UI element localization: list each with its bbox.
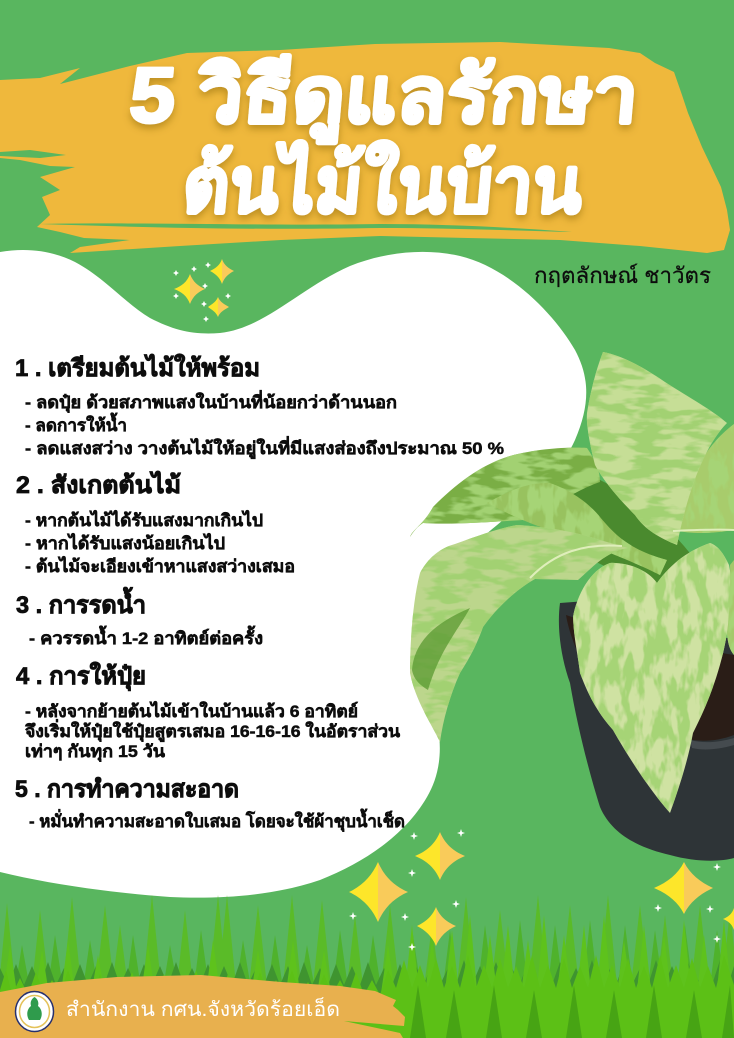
sparkle edge — [723, 908, 734, 930]
grass front — [0, 955, 734, 1038]
sparkle large — [349, 862, 408, 922]
sparkle lower — [208, 297, 229, 317]
bullet: - ลดแสงสว่าง วางต้นไม้ให้อยู่ในที่มีแสงส่องถึงประมาณ 50 % — [25, 436, 504, 460]
front large leaf — [573, 543, 732, 813]
heading 1: 1 . เตรียมต้นไม้ให้พร้อม — [15, 353, 260, 382]
line: - หลังจากย้ายต้นไม้เข้าในบ้านแล้ว 6 อาทิตย์ — [25, 701, 358, 721]
grass upper front blades — [2, 915, 732, 1000]
upper right leaf — [673, 424, 734, 533]
byline: กฤตลักษณ์ ชาวัตร — [534, 263, 711, 288]
sparkle large — [174, 274, 205, 304]
leaf stem — [530, 530, 734, 578]
line: จึงเริ่มให้ปุ๋ยใช้ปุ๋ยสูตรเสมอ 16-16-16 ในอัตราส่วน — [25, 719, 400, 743]
lower left leaf — [410, 525, 628, 742]
sparkle upper — [210, 259, 234, 284]
sparkles top — [173, 259, 234, 322]
heading 4: 4 . การให้ปุ๋ย — [16, 661, 146, 692]
dark back leaf — [560, 480, 695, 590]
footer text: สำนักงาน กศน.จังหวัดร้อยเอ็ด — [66, 996, 340, 1021]
logo — [16, 992, 54, 1032]
sparkle right — [654, 862, 713, 914]
sparkle small — [417, 907, 456, 946]
section 4 text — [25, 701, 400, 762]
lower left leaf dark patch — [412, 608, 470, 690]
bullet: - ต้นไม้จะเอียงเข้าหาแสงสว่างเสมอ — [25, 556, 295, 576]
top large leaf — [587, 352, 727, 545]
title — [126, 51, 642, 229]
grass dark shadow band — [0, 960, 734, 1038]
grass — [0, 895, 734, 1038]
logo emblem — [27, 997, 42, 1020]
grass tall blades — [0, 895, 734, 995]
heading 5: 5 . การทำความสะอาด — [15, 776, 239, 803]
grass blade highlights — [410, 985, 734, 1038]
middle leaf — [487, 483, 667, 575]
section 2 list — [25, 510, 295, 576]
grass short blades — [14, 920, 726, 995]
plant photo — [410, 352, 734, 861]
sparkle top — [415, 832, 465, 880]
white content panel — [0, 250, 586, 898]
bullet: - หากต้นไม้ได้รับแสงมากเกินไป — [25, 510, 263, 530]
banner green streak — [0, 150, 572, 232]
soil — [566, 615, 734, 741]
title line 2: ต้นไม้ในบ้าน — [180, 139, 586, 229]
bullet: - หากได้รับแสงน้อยเกินไป — [25, 533, 225, 553]
title line 1: 5 วิธีดูแลรักษา — [126, 51, 642, 144]
footer banner — [0, 975, 405, 1038]
right edge leaf — [727, 560, 734, 655]
bullet: - ลดปุ๋ย ด้วยสภาพแสงในบ้านที่น้อยกว่าด้านนอก — [25, 390, 397, 413]
heading 3: 3 . การรดน้ำ — [16, 586, 146, 619]
upper left leaf — [410, 448, 600, 537]
pot rim highlight — [690, 738, 734, 749]
line: เท่าๆ กันทุก 15 วัน — [25, 742, 165, 762]
section 3 text: - ควรรดน้ำ 1-2 อาทิตย์ต่อครั้ง — [29, 625, 263, 648]
bullet: - ลดการให้น้ำ — [25, 412, 127, 435]
logo disc — [16, 992, 54, 1032]
tiny sparkles — [349, 829, 721, 951]
section 1 list — [25, 390, 504, 460]
section 5 text: - หมั่นทำความสะอาดใบเสมอ โดยจะใช้ผ้าชุบน้ำเช็ด — [29, 808, 405, 832]
pot — [559, 600, 734, 861]
logo ring — [20, 996, 50, 1028]
tiny sparkles — [173, 262, 231, 322]
sparkles bottom — [349, 829, 734, 951]
heading 2: 2 . สังเกตต้นไม้ — [16, 470, 181, 499]
paint brush banner — [0, 42, 730, 253]
